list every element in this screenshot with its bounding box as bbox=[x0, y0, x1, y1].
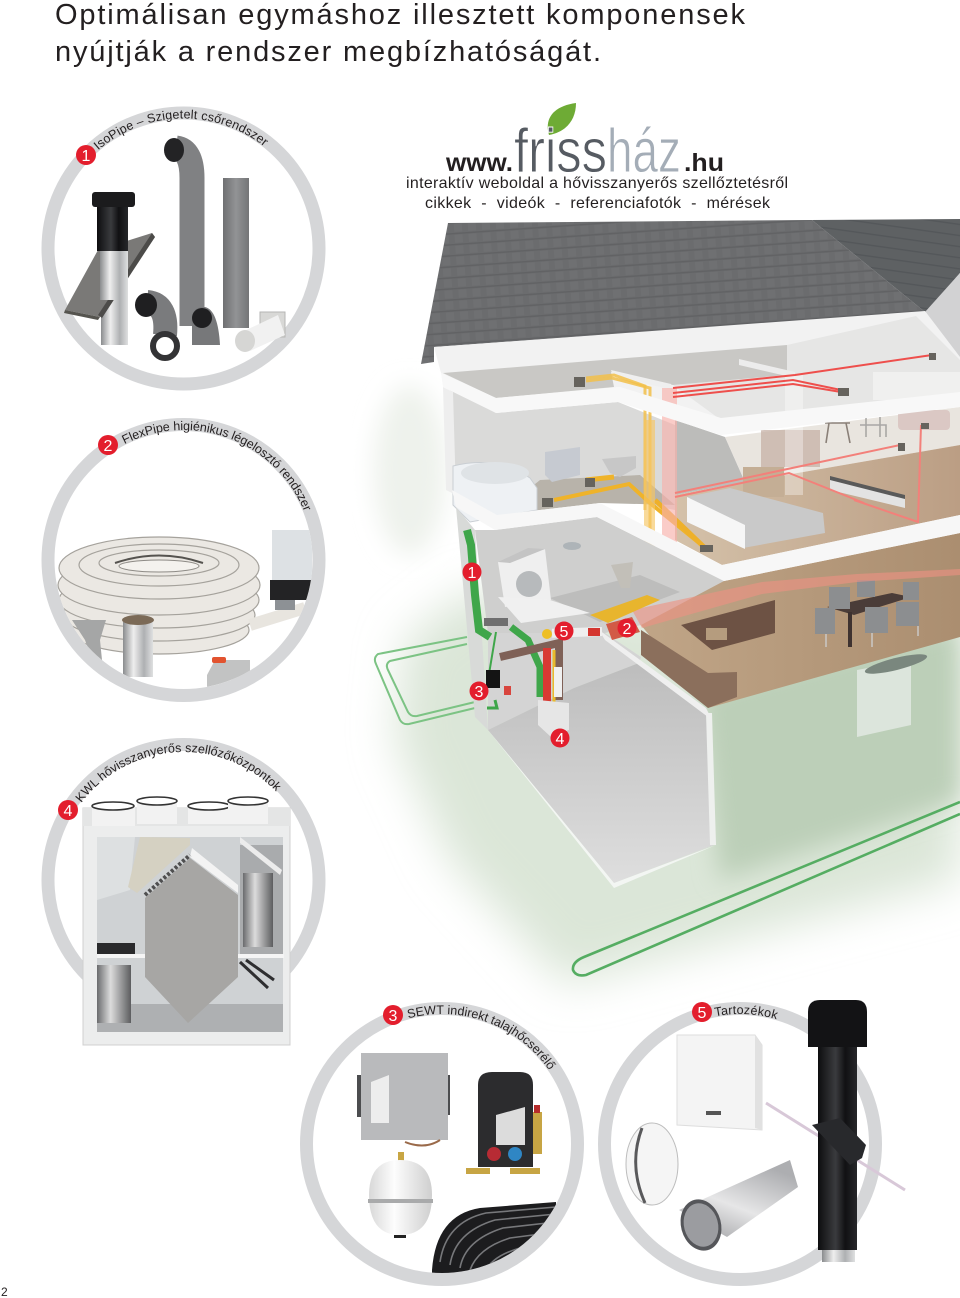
curved heading: FlexPipe higiénikus légelosztó rendszer bbox=[122, 420, 310, 510]
sink cabinet bbox=[545, 447, 580, 482]
black pipe coil bbox=[432, 1202, 556, 1280]
brown extract duct bbox=[500, 643, 559, 700]
attic right wall bbox=[673, 316, 960, 420]
silencer duct bbox=[675, 1160, 798, 1255]
ground haze bbox=[395, 590, 960, 985]
translucent partition bbox=[785, 375, 803, 495]
ring bbox=[48, 113, 319, 384]
ventilation unit bbox=[538, 700, 569, 737]
horizontal pipes bbox=[542, 617, 640, 640]
ring bbox=[604, 1008, 876, 1280]
slab edge over basement bbox=[599, 630, 712, 720]
roof vent product bbox=[64, 192, 155, 345]
ventilation unit photo bbox=[83, 797, 290, 1045]
kitchen island bbox=[681, 600, 775, 650]
basement floor bbox=[488, 663, 714, 883]
badge house 1: 1 bbox=[468, 565, 477, 582]
badge house 3 bbox=[470, 682, 488, 701]
badge house 5: 5 bbox=[560, 624, 569, 641]
logo frissház: www. bbox=[445, 149, 513, 177]
utility shelf bbox=[498, 597, 590, 623]
attic partition bbox=[611, 370, 673, 390]
yellow duct bbox=[552, 650, 556, 703]
curved heading: SEWT indirekt talajhőcserélő bbox=[408, 1005, 556, 1069]
bed bbox=[687, 488, 825, 549]
shelves bbox=[97, 954, 145, 958]
silencer bbox=[554, 667, 562, 697]
slab front brown bbox=[641, 630, 737, 708]
attic translucent wall bbox=[873, 372, 960, 400]
straight pipe bbox=[223, 178, 249, 328]
logo frissház: .hu bbox=[684, 149, 724, 177]
badge house 2: 2 bbox=[623, 621, 632, 638]
badge house 4: 4 bbox=[556, 731, 565, 748]
middle left room back wall bbox=[450, 388, 675, 510]
yellow ducts upper bbox=[554, 375, 704, 590]
roof side bbox=[925, 273, 960, 360]
slab two bbox=[452, 490, 960, 581]
ring bbox=[48, 744, 319, 1016]
red duct bbox=[543, 648, 551, 703]
icon: leaf bbox=[548, 103, 576, 135]
ring bbox=[306, 1008, 578, 1280]
right room back wall bbox=[725, 407, 960, 482]
fascia and upper wall bbox=[434, 311, 960, 420]
logo frissház: ház bbox=[607, 117, 681, 186]
window well bbox=[857, 660, 911, 737]
ground loop left bbox=[375, 637, 475, 724]
roof hip bbox=[812, 219, 960, 312]
white vent bbox=[235, 312, 285, 352]
fan left bbox=[97, 965, 131, 1023]
white wall box bbox=[677, 1035, 762, 1130]
insulated pump group bbox=[466, 1072, 542, 1174]
ring bbox=[48, 424, 319, 696]
flashing bbox=[766, 1103, 905, 1190]
level one right room light bbox=[550, 575, 680, 622]
badge bbox=[98, 435, 118, 455]
title: nyújtják a rendszer megbízhatóságát. bbox=[55, 36, 601, 68]
wiring bbox=[240, 960, 274, 988]
website description: cikkek - videók - referenciafotók - mérések bbox=[425, 195, 771, 212]
heat exchanger hexagon bbox=[145, 858, 238, 1023]
small dark box bbox=[97, 943, 135, 954]
yellow riser bbox=[644, 420, 655, 592]
manifold bbox=[484, 618, 508, 626]
red ducts upper bbox=[673, 355, 932, 397]
badge: 1 bbox=[82, 148, 91, 165]
wc bbox=[611, 562, 633, 588]
photo: pipe coil and fittings bbox=[58, 530, 312, 687]
badge bbox=[692, 1002, 712, 1022]
panel: Tartozékok bbox=[598, 1000, 906, 1286]
middle left wall bbox=[443, 387, 456, 495]
short elbow bbox=[192, 307, 220, 345]
salmon supply duct bbox=[632, 569, 960, 628]
grate bbox=[863, 650, 929, 678]
exchanger frame strip bbox=[190, 848, 238, 893]
panel: SEWT bbox=[300, 1002, 584, 1286]
panel: IsoPipe bbox=[42, 106, 326, 390]
badge bbox=[58, 800, 78, 820]
toilet bbox=[602, 456, 636, 477]
badge: 2 bbox=[104, 438, 113, 455]
filter upper left bbox=[128, 837, 190, 893]
badge house 1 bbox=[462, 562, 482, 582]
title bbox=[55, 0, 746, 68]
yellow horizontal duct bbox=[590, 595, 660, 623]
ground haze right bbox=[700, 620, 960, 880]
filter upper right bbox=[240, 837, 282, 875]
curved heading: Tartozékok bbox=[714, 1006, 778, 1020]
website description bbox=[406, 175, 788, 212]
roof left slope bbox=[421, 220, 925, 364]
house cutaway illustration bbox=[374, 219, 960, 985]
badge house 2 bbox=[618, 618, 636, 638]
basement back wall bbox=[488, 633, 641, 730]
red riser bbox=[662, 388, 677, 603]
bathroom floor bbox=[497, 475, 675, 515]
website description: interaktív weboldal a hővisszanyerős szellőztetésről bbox=[406, 175, 788, 192]
right room furniture bbox=[743, 410, 950, 508]
dining set bbox=[815, 580, 919, 647]
red ducts lower bbox=[675, 425, 921, 522]
badge: 5 bbox=[698, 1005, 707, 1022]
grey exchanger box bbox=[357, 1053, 450, 1146]
diffusers bbox=[542, 353, 936, 552]
wood floor level one bbox=[641, 533, 960, 708]
basement right wall edge bbox=[706, 713, 716, 845]
wash basin bbox=[563, 542, 581, 550]
curved heading: KWL hővisszanyerős szellőzőközpontok bbox=[75, 743, 281, 802]
bath bbox=[453, 462, 537, 522]
expansion vessel bbox=[504, 686, 511, 695]
ground loop lower bbox=[573, 802, 960, 975]
right room grey wall bbox=[675, 420, 745, 495]
badge: 4 bbox=[64, 803, 73, 820]
attic left room bbox=[443, 345, 787, 398]
logo frissház: friss bbox=[514, 117, 607, 186]
curved heading: IsoPipe – Szigetelt csőrendszer bbox=[94, 110, 268, 150]
round valve disc bbox=[626, 1123, 678, 1205]
badge house 4 bbox=[550, 728, 570, 748]
green ducts bbox=[467, 530, 540, 708]
top spigots bbox=[92, 797, 268, 826]
badge house 3: 3 bbox=[475, 684, 484, 701]
attic partition 2 bbox=[739, 359, 795, 378]
panel: KWL bbox=[42, 738, 326, 1046]
fan right bbox=[243, 873, 273, 947]
expansion tank bbox=[368, 1152, 433, 1238]
badge bbox=[76, 145, 96, 165]
elbow and ring bbox=[135, 293, 177, 358]
long elbow pipe bbox=[164, 138, 192, 326]
washing machine bbox=[498, 548, 551, 607]
badge bbox=[383, 1005, 403, 1025]
tree haze bbox=[374, 385, 446, 555]
level one back wall bbox=[475, 517, 724, 633]
sewt module bbox=[486, 670, 500, 688]
black roof vent bbox=[808, 1000, 867, 1262]
logo frissház bbox=[445, 103, 724, 186]
right room floor bbox=[675, 445, 960, 565]
left outer wall bbox=[456, 507, 488, 730]
badge house 5 bbox=[554, 622, 574, 641]
exchanger dark strip bbox=[145, 855, 190, 895]
panel: FlexPipe bbox=[42, 418, 326, 702]
floor edge white bbox=[488, 730, 716, 888]
badge: 3 bbox=[389, 1008, 398, 1025]
top slab bbox=[441, 373, 960, 435]
